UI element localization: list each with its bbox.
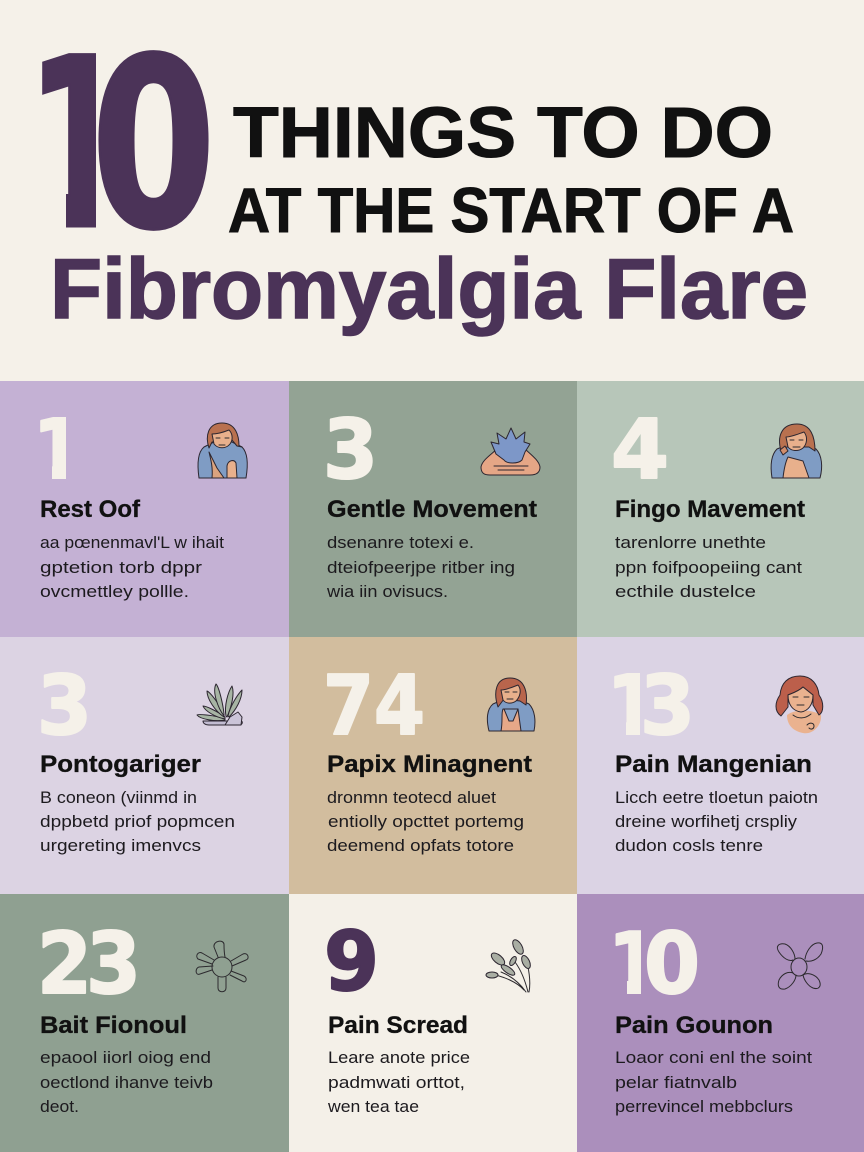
card 4 body — [40, 788, 235, 855]
card 9 body — [615, 1048, 812, 1116]
card 8 body: Leare anote price — [328, 1048, 470, 1067]
card 1 body — [40, 533, 224, 601]
card 3 number: 4 — [611, 403, 669, 498]
card 5 heading: Papix Minagnent — [327, 751, 532, 778]
card 2 number: 3 — [323, 403, 378, 498]
card 4 heading: Pontogariger — [40, 751, 201, 778]
title: line one: THINGS TO DO — [233, 94, 773, 173]
card 9 body: Loaor coni enl the soint — [615, 1048, 812, 1067]
card 7 number — [37, 915, 141, 1014]
card 1 body: ovcmettley pollle. — [40, 582, 189, 601]
card 5 body: dronmn teotecd aluet — [327, 788, 496, 807]
card 3 body — [615, 533, 802, 601]
card 7 number: 3 — [86, 915, 141, 1014]
panel: card 4 — [0, 637, 289, 894]
icon: woman holding face — [771, 424, 822, 478]
card 6 number: 3 — [640, 659, 695, 754]
icon: plant — [197, 684, 242, 725]
title: line three: Fibromyalgia Flare — [50, 242, 808, 337]
icon: woman touching neck — [776, 676, 823, 733]
icon: herb sprig — [486, 938, 532, 992]
card 4 body: urgereting imenvcs — [40, 836, 201, 855]
card 8 body: padmwati orttot, — [328, 1073, 465, 1092]
title: big number 10: 1 — [26, 9, 132, 282]
card 3 body: tarenlorre unethte — [615, 533, 766, 552]
panel: card 6 — [577, 637, 864, 894]
card 5 body: entiolly opcttet portemg — [328, 812, 524, 831]
card 4 number: 3 — [37, 659, 92, 754]
card 2 body: dsenanre totexi e. — [327, 533, 474, 552]
icon: head down with spiky pain — [481, 428, 540, 475]
card 7 body: deot. — [40, 1097, 79, 1116]
card 8 body: wen tea tae — [327, 1097, 419, 1116]
card 1 body: gptetion torb dppr — [40, 558, 202, 577]
card 7 body — [40, 1048, 213, 1116]
card 9 body: perrevincel mebbclurs — [615, 1097, 793, 1116]
panel: card 2 — [289, 381, 577, 637]
card 8 body — [327, 1048, 470, 1116]
panel: card 5 — [289, 637, 577, 894]
card 7 body: epaool iiorl oiog end — [40, 1048, 211, 1067]
title: line two: AT THE START OF A — [228, 176, 794, 246]
card 6 body: dreine worfihetj crspliy — [615, 812, 798, 831]
panel: card 1 — [0, 381, 289, 637]
icon: radiating nerve shape — [196, 941, 248, 992]
panel: card 9 — [577, 894, 864, 1152]
card 6 body: Licch eetre tloetun paiotn — [615, 788, 818, 807]
card 9 body: pelar fiatnvalb — [615, 1073, 737, 1092]
card 2 body: wia iin ovisucs. — [326, 582, 448, 601]
panel: card 8 — [289, 894, 577, 1152]
icon: woman with head bowed — [487, 678, 535, 731]
card 7 heading: Bait Fionoul — [40, 1012, 187, 1039]
card 9 number: 1 — [608, 915, 660, 1014]
title — [42, 50, 806, 337]
card 5 body: deemend opfats totore — [327, 836, 514, 855]
card 6 number: 1 — [607, 659, 657, 754]
card 1 number: 1 — [33, 403, 83, 498]
card 2 heading: Gentle Movement — [327, 496, 537, 523]
card 1 body: aa pœnenmavl'L w ihait — [40, 533, 224, 552]
card 4 body: B coneon (viinmd in — [40, 788, 197, 807]
card 6 heading: Pain Mangenian — [615, 751, 812, 778]
card 6 number — [614, 672, 690, 736]
card 2 body: dteiofpeerjpe ritber ing — [327, 558, 515, 577]
icon: woman in pain — [198, 423, 247, 478]
icon: butterfly shaped flower — [777, 943, 823, 989]
card 3 heading: Fingo Mavement — [615, 496, 805, 523]
card 8 number: 9 — [324, 915, 379, 1010]
card 9 number: 0 — [644, 915, 700, 1014]
card 5 number: 74 — [323, 659, 425, 754]
card 1 heading: Rest Oof — [40, 496, 141, 523]
panel: card 7 — [0, 894, 289, 1152]
card 6 body: dudon cosls tenre — [615, 836, 763, 855]
card 8 heading: Pain Scread — [328, 1012, 468, 1039]
card 2 body — [326, 533, 515, 601]
card 3 body: ppn foifpoopeiing cant — [615, 558, 802, 577]
title: big number 10 — [42, 50, 209, 231]
card 3 body: ecthile dustelce — [615, 582, 756, 601]
card 4 body: dppbetd priof popmcen — [40, 812, 235, 831]
card 6 body — [615, 788, 818, 855]
card 7 number: 2 — [37, 915, 92, 1014]
card 5 body — [327, 788, 524, 855]
card 7 body: oectlond ihanve teivb — [40, 1073, 213, 1092]
panel: card 3 — [577, 381, 864, 637]
card 9 heading: Pain Gounon — [615, 1012, 773, 1039]
title: big number 10: 0 — [91, 9, 216, 282]
card 9 number — [616, 929, 698, 995]
